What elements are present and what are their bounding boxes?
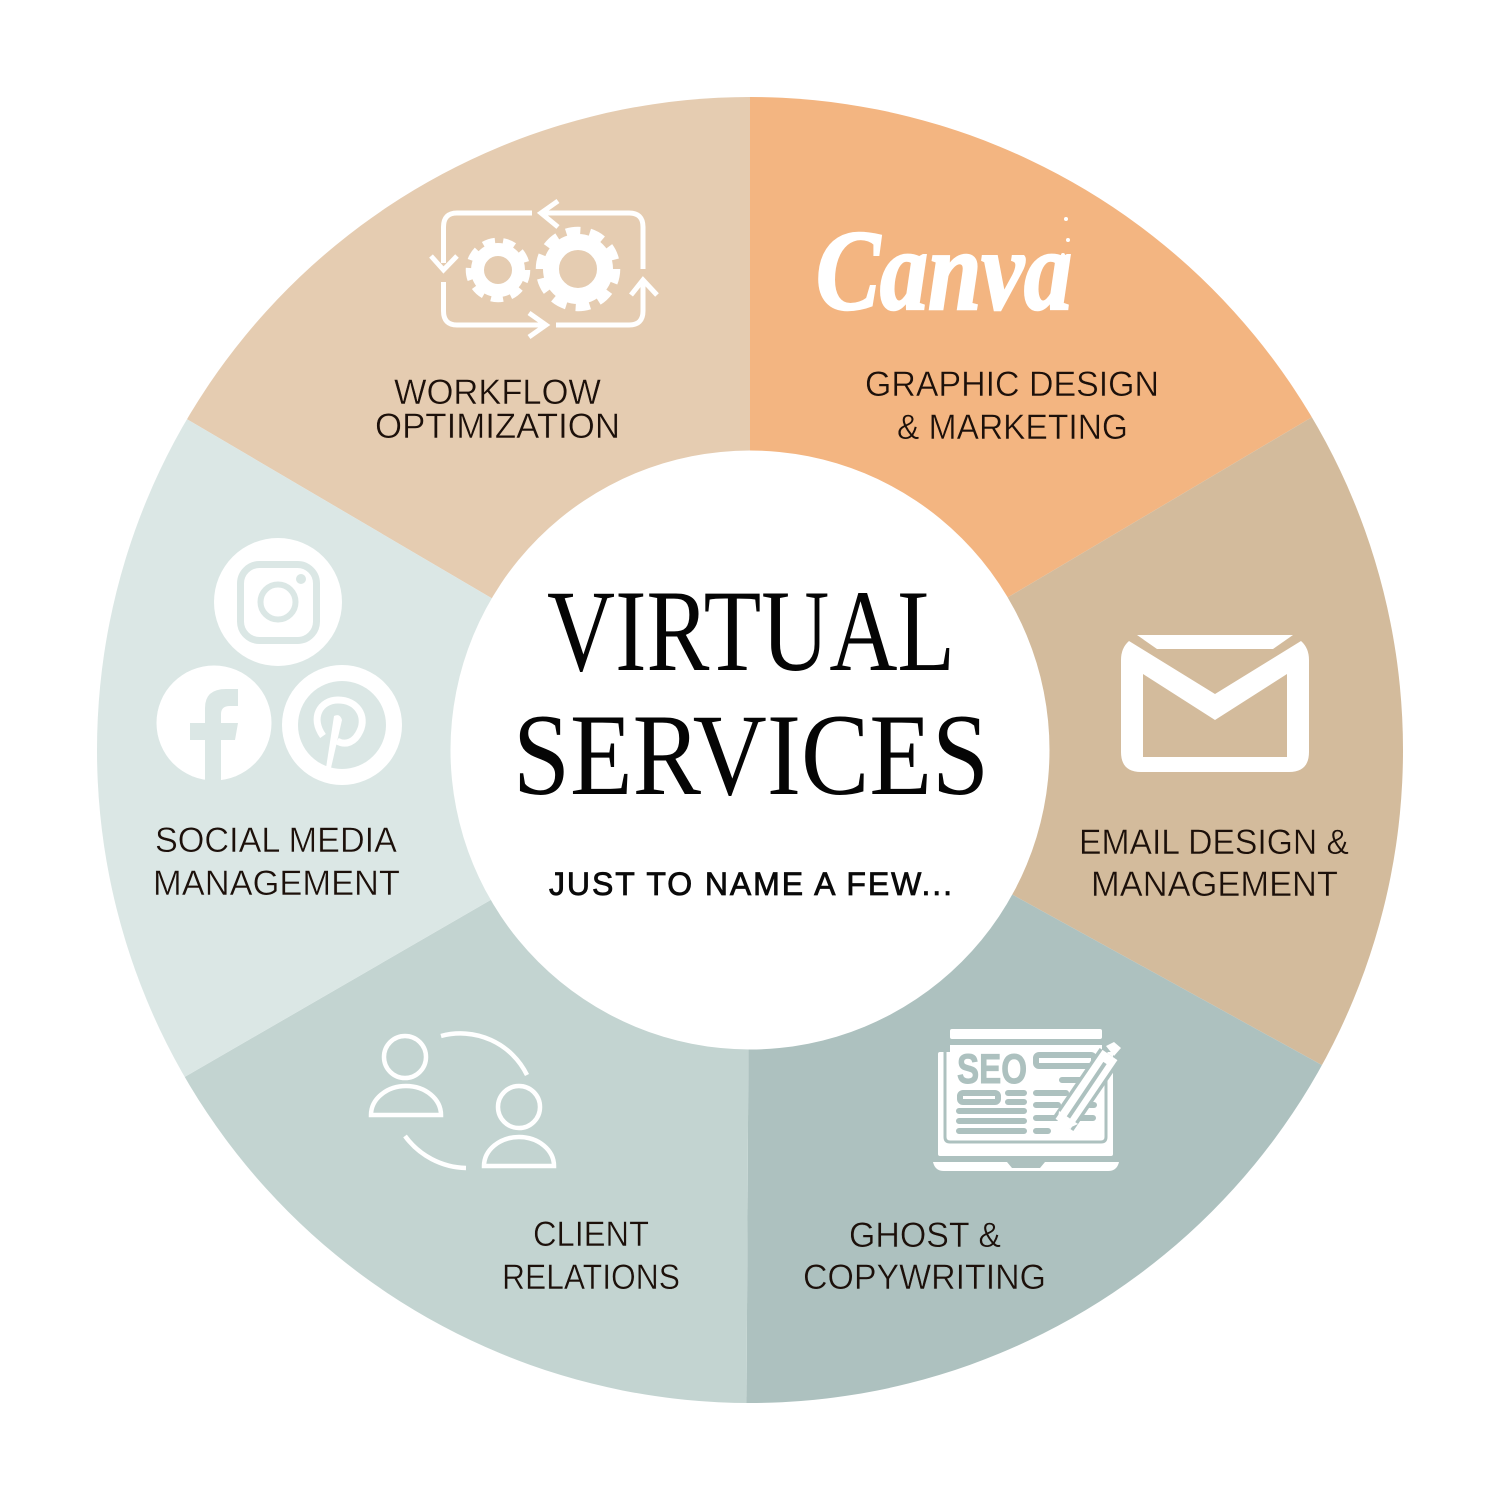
wedge: copywriting	[746, 894, 1322, 1403]
label: social media management	[153, 821, 400, 903]
label: graphic design and marketing: GRAPHIC DESIGN	[865, 365, 1159, 404]
panel: client relations	[184, 900, 748, 1403]
panel: social media management	[97, 420, 492, 1077]
label: workflow optimization: OPTIMIZATION	[375, 407, 620, 446]
label: client relations	[502, 1215, 680, 1297]
icon: canva wordmark: Canva	[816, 207, 1072, 334]
label: client relations: RELATIONS	[502, 1258, 680, 1297]
icon: pinterest	[282, 665, 402, 785]
wedge: workflow	[187, 97, 750, 598]
label: social media management: MANAGEMENT	[153, 864, 400, 903]
wedge: graphic design	[750, 97, 1312, 598]
icon: instagram	[214, 538, 342, 666]
center disc	[450, 450, 1050, 1050]
center circle with title	[450, 450, 1050, 1050]
wedge: email	[1008, 417, 1403, 1065]
label: ghost and copywriting	[803, 1216, 1046, 1297]
label: graphic design and marketing: & MARKETING	[897, 408, 1128, 447]
label: ghost and copywriting: GHOST &	[849, 1216, 1001, 1255]
label: graphic design and marketing	[865, 365, 1159, 447]
label: client relations: CLIENT	[533, 1215, 649, 1254]
label: email design and management: EMAIL DESIGN &	[1079, 823, 1349, 862]
label: social media management: SOCIAL MEDIA	[155, 821, 398, 860]
tagline: JUST TO NAME A FEW...	[549, 866, 952, 902]
icon: envelope	[1121, 635, 1309, 772]
panel: workflow optimization	[187, 97, 750, 598]
title: virtual services: SERVICES	[513, 691, 989, 820]
panel: graphic design and marketing	[750, 97, 1312, 598]
label: ghost and copywriting: COPYWRITING	[803, 1258, 1046, 1297]
icon: gears with cycle arrows	[431, 201, 657, 337]
wedge: social media	[97, 420, 492, 1077]
icon: facebook	[156, 666, 272, 782]
icon: two people exchange	[371, 1033, 554, 1168]
title: virtual services	[513, 567, 989, 820]
label: email design and management: MANAGEMENT	[1091, 865, 1338, 904]
icon: seo laptop with pencil	[933, 1029, 1121, 1171]
label: email design and management	[1079, 823, 1349, 904]
infographic: virtual services wheel	[97, 97, 1403, 1403]
label: workflow optimization	[375, 373, 620, 446]
wedge: client relations	[184, 900, 748, 1403]
panel: ghost and copywriting	[746, 894, 1322, 1403]
panel: email design and management	[1008, 417, 1403, 1065]
icon: seo laptop with pencil: SEO	[957, 1045, 1027, 1092]
label: workflow optimization: WORKFLOW	[394, 373, 601, 412]
title: virtual services: VIRTUAL	[547, 567, 955, 696]
